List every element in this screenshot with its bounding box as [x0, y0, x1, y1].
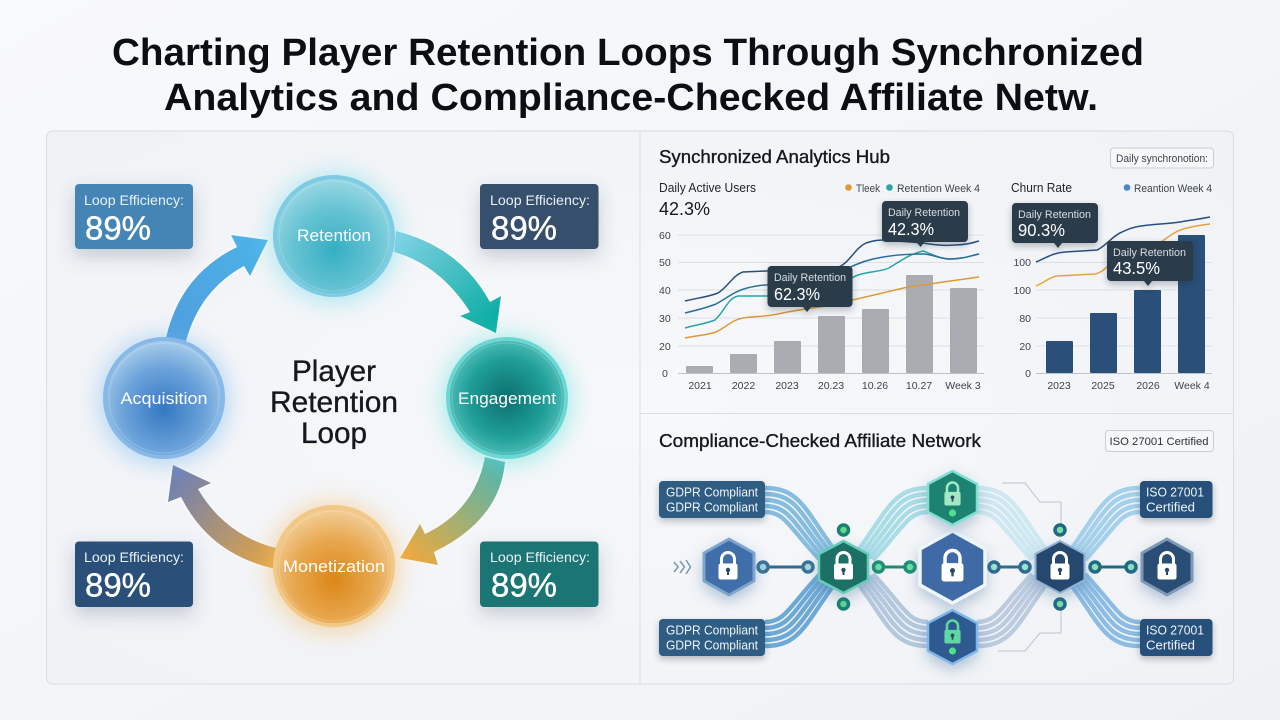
stat card: top right: 89% [491, 210, 557, 246]
badge: daily sync [1110, 148, 1214, 168]
stat card: bottom left [75, 542, 193, 607]
node: retention [270, 174, 398, 302]
y axis labels: 0 [662, 368, 668, 380]
tooltip: 62.3%: Daily Retention [774, 272, 846, 284]
node: monetization: Monetization [283, 557, 385, 576]
stat card: bottom right: 89% [491, 566, 557, 604]
x axis labels: Week 3 [945, 380, 981, 392]
y axis labels: 20 [1019, 341, 1031, 353]
node: engagement: Engagement [458, 389, 556, 408]
tooltip: 43.5%: 43.5% [1113, 258, 1160, 278]
label: gdpr top: GDPR Compliant [666, 500, 758, 514]
center label: Loop [301, 417, 367, 450]
hex: left lock [704, 539, 754, 595]
x axis labels [1047, 380, 1210, 392]
label: iso top: ISO 27001 [1146, 486, 1204, 500]
label: iso bottom: Certified [1146, 638, 1195, 652]
chart heading [659, 181, 756, 219]
icon: chevrons [674, 560, 690, 574]
stat card: top right: Loop Efficiency: [490, 192, 590, 208]
tooltip: 90.3%: 90.3% [1018, 220, 1065, 240]
tooltip: 62.3%: 62.3% [774, 284, 820, 304]
arrow: monetization to acquisition [168, 465, 276, 569]
x axis labels: 2023 [1047, 380, 1071, 392]
x axis labels: 2023 [775, 380, 799, 392]
x axis labels: 10.27 [906, 380, 932, 392]
network flow bundles [765, 488, 1140, 646]
hex: right lock [1142, 539, 1192, 595]
hex: navy hub lock [1036, 541, 1084, 593]
hex: top green lock [928, 471, 977, 525]
heading: affiliate network: Compliance-Checked Affiliate Network [659, 431, 982, 451]
node: engagement [443, 336, 571, 464]
chart heading: Churn Rate [1011, 181, 1072, 195]
panel: player retention loop [75, 174, 598, 632]
y axis labels: 100 [1013, 257, 1031, 269]
label: iso top: Certified [1146, 500, 1195, 514]
legend [845, 183, 980, 195]
x axis labels: 2025 [1091, 380, 1115, 392]
node: acquisition: Acquisition [120, 389, 208, 408]
connectors [758, 525, 1136, 609]
tooltip: 90.3%: Daily Retention [1018, 209, 1091, 221]
title: Analytics and Compliance-Checked Affiliate Netw. [164, 77, 1098, 119]
y axis labels [1013, 257, 1031, 380]
chart: churn rate [1011, 181, 1212, 392]
x axis labels: 10.26 [862, 380, 888, 392]
y axis labels: 60 [659, 230, 671, 242]
node: acquisition [100, 336, 228, 464]
panel: compliance-checked affiliate network [659, 430, 1214, 664]
label: gdpr top [659, 481, 765, 518]
bars [686, 275, 977, 373]
arrow: retention to engagement [394, 231, 501, 333]
tooltip: 90.3% [1012, 203, 1098, 248]
label: gdpr bottom: GDPR Compliant [666, 638, 758, 652]
line series [685, 240, 979, 338]
chart heading: Daily Active Users [659, 181, 756, 195]
hex: center lock [920, 531, 985, 603]
legend: Retention Week 4 [897, 183, 980, 195]
badge: daily sync: Daily synchronotion: [1116, 153, 1208, 165]
tooltip: 42.3% [882, 201, 968, 247]
stat card: bottom right [480, 542, 598, 607]
arrow: acquisition to retention [166, 235, 268, 341]
bars [1046, 235, 1205, 373]
label: iso bottom: ISO 27001 [1146, 624, 1204, 638]
legend: Tleek [856, 183, 880, 195]
heading: analytics hub: Synchronized Analytics Hub [659, 147, 890, 167]
center label: Retention [270, 386, 398, 419]
tooltip: 43.5%: Daily Retention [1113, 247, 1186, 259]
panel: synchronized analytics hub [659, 147, 1214, 392]
stat card: top left: Loop Efficiency: [84, 192, 184, 208]
stat card: bottom right: Loop Efficiency: [490, 549, 590, 565]
y axis labels: 30 [659, 313, 671, 325]
badge: iso certified [1106, 430, 1214, 452]
x axis labels: 2026 [1136, 380, 1160, 392]
node: monetization [270, 504, 398, 632]
hex: green hub lock [819, 541, 868, 593]
stat card: top left: 89% [85, 210, 151, 246]
stat card: top left [75, 184, 193, 249]
center label [270, 355, 398, 450]
label: iso top [1140, 481, 1212, 518]
stat card: bottom left: 89% [85, 566, 151, 604]
x axis labels [688, 380, 981, 392]
y axis labels [659, 230, 671, 380]
y axis labels: 100 [1013, 285, 1031, 297]
badge: iso certified: ISO 27001 Certified [1110, 436, 1208, 448]
x axis labels: 2022 [732, 380, 755, 392]
label: gdpr bottom: GDPR Compliant [666, 624, 758, 638]
legend: Reantion Week 4 [1134, 183, 1212, 195]
arrow: engagement to monetization [400, 457, 505, 565]
center label: Player [292, 355, 376, 388]
label: gdpr top: GDPR Compliant [666, 486, 758, 500]
stat card: top right [480, 184, 598, 249]
hex: bottom blue lock [928, 610, 977, 664]
chart heading: 42.3% [659, 199, 710, 219]
line series [1036, 217, 1210, 286]
y axis labels: 40 [659, 285, 671, 297]
stat card: bottom left: Loop Efficiency: [84, 549, 184, 565]
y axis labels: 50 [659, 257, 671, 269]
panel: outer frame [46, 131, 1234, 684]
tooltip: 43.5% [1107, 241, 1193, 286]
x axis labels: 20.23 [818, 380, 844, 392]
x axis labels: 2021 [688, 380, 712, 392]
x axis labels: Week 4 [1174, 380, 1210, 392]
tooltip: 42.3%: Daily Retention [888, 207, 960, 219]
y axis labels: 80 [1019, 313, 1031, 325]
chart: daily active users [659, 181, 984, 392]
title [112, 32, 1144, 119]
y axis labels: 20 [659, 341, 671, 353]
tooltip: 62.3% [768, 266, 852, 312]
title: Charting Player Retention Loops Through Synchronized [112, 32, 1144, 74]
y axis labels: 0 [1025, 368, 1031, 380]
tooltip: 42.3%: 42.3% [888, 219, 934, 239]
node: retention: Retention [297, 226, 371, 245]
label: iso bottom [1140, 619, 1212, 656]
label: gdpr bottom [659, 619, 765, 656]
